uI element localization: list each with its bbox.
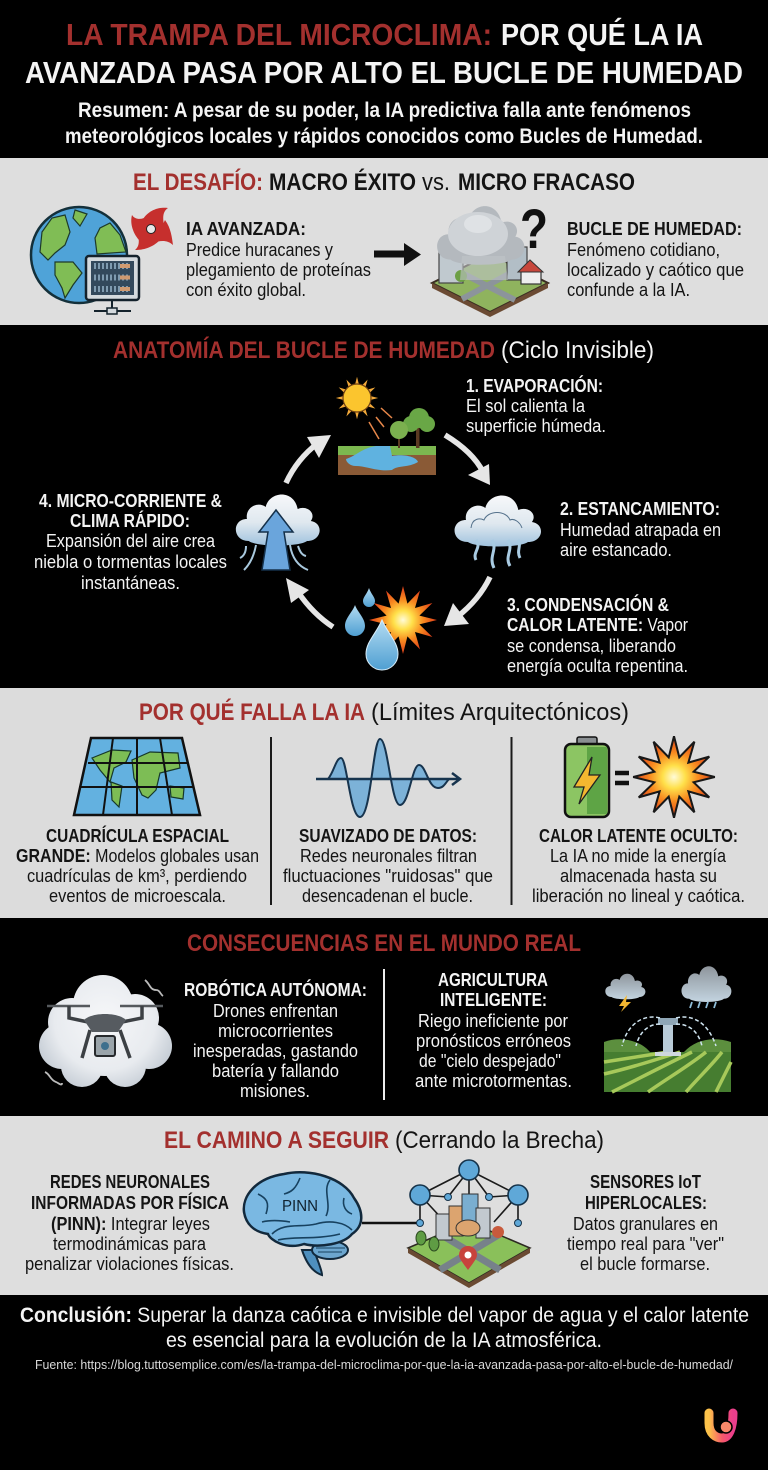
icon: cloud over city block (432, 206, 548, 317)
arrow: step 3 to 4 (286, 578, 333, 627)
icon: hurricane (131, 208, 173, 250)
text: IA avanzada: plegamiento de proteínas (186, 259, 371, 280)
heading: anatomía: ANATOMÍA DEL BUCLE DE HUMEDAD (113, 336, 495, 364)
text: sensores: el bucle formarse. (580, 1253, 710, 1274)
text: calor latente: almacenada hasta su (560, 865, 717, 886)
text: cuadrícula (16, 825, 259, 906)
text: robótica: microcorrientes (218, 1020, 333, 1041)
text: agricultura: ante microtormentas. (415, 1070, 572, 1091)
text: cuadrícula: cuadrículas de km³, perdiendo (27, 865, 247, 886)
text: evaporación: El sol calienta la (466, 395, 586, 416)
heading: el desafío: vs. (422, 169, 450, 196)
text: suavizado: desencadenan el bucle. (302, 885, 473, 906)
icon: IoT city network (408, 1160, 530, 1288)
text: suavizado: Redes neuronales filtran (300, 845, 477, 866)
connector line (362, 1222, 417, 1224)
text: calor latente (532, 825, 745, 906)
conclusion text: es esencial para la evolución de la IA atmosférica. (166, 1329, 602, 1352)
icon: spatial grid map (74, 738, 200, 815)
logo (709, 1413, 733, 1438)
heading: el desafío (133, 168, 635, 196)
icon: PINN brain (244, 1172, 361, 1275)
text: estancamiento: aire estancado. (560, 539, 672, 560)
icon: battery equals burst (565, 736, 715, 818)
icon: rising air in cloud (236, 494, 320, 570)
icon: smart irrigation field (604, 966, 731, 1092)
arrow: step 2 to 3 (444, 577, 490, 626)
text: sensores: Datos granulares en (573, 1213, 718, 1234)
heading: anatomía: (Ciclo Invisible) (501, 337, 654, 364)
text: micro-corriente: Expansión del aire crea (46, 530, 216, 551)
heading: por qué falla: (Límites Arquitectónicos) (371, 699, 629, 726)
heading: consecuencias: CONSECUENCIAS EN EL MUNDO REAL (187, 930, 581, 957)
panel: por qué falla la IA (0, 688, 768, 918)
summary text: Resumen: A pesar de su poder, la IA predictiva falla ante fenómenos (78, 99, 691, 122)
text: sensores: HIPERLOCALES: (585, 1192, 707, 1213)
text: suavizado (283, 825, 493, 906)
text: cuadrícula: eventos de microescala. (49, 885, 226, 906)
text: robótica: Drones enfrentan (213, 1000, 338, 1021)
text: PINN: termodinámicas para (53, 1233, 207, 1254)
heading: camino (164, 1127, 604, 1154)
text: condensación: 3. CONDENSACIÓN & (507, 594, 669, 615)
text: IA avanzada: Predice huracanes y (186, 239, 334, 260)
text: suavizado: fluctuaciones "ruidosas" que (283, 865, 493, 886)
text: evaporación: superficie húmeda. (466, 415, 606, 436)
text: robótica: batería y fallando (212, 1060, 339, 1081)
icon: water drops and latent heat burst (345, 586, 437, 670)
text: bucle de humedad: localizado y caótico que (567, 259, 744, 280)
text: IA avanzada (186, 218, 371, 300)
text: bucle de humedad: BUCLE DE HUMEDAD: (567, 218, 742, 239)
heading: por qué falla (139, 698, 629, 726)
icon: sun and wet ground (336, 377, 436, 475)
panel: header (0, 0, 768, 158)
text: robótica (184, 979, 367, 1101)
heading: el desafío: EL DESAFÍO: (133, 168, 263, 196)
text: micro-corriente: CLIMA RÁPIDO: (70, 510, 190, 531)
text: agricultura: pronósticos erróneos (416, 1030, 571, 1051)
text: evaporación: 1. EVAPORACIÓN: (466, 375, 603, 396)
title: POR QUÉ LA IA (501, 17, 703, 52)
text: robótica: misiones. (240, 1080, 310, 1101)
text: estancamiento: Humedad atrapada en (560, 519, 721, 540)
text: sensores: SENSORES IoT (590, 1171, 702, 1192)
text: IA avanzada: IA AVANZADA: (186, 218, 306, 239)
text: cuadrícula: CUADRÍCULA ESPACIAL (46, 825, 229, 846)
text: bucle de humedad: Fenómeno cotidiano, (567, 239, 720, 260)
source: Fuente: https://blog.tuttosemplice.com/es/la-trampa-del-microclima-por-que-la-ia-avanzada-pasa-por-alto-el-bucle-de-humedad/ (35, 1358, 734, 1372)
text: agricultura (415, 969, 572, 1091)
text: IA avanzada: con éxito global. (186, 279, 306, 300)
summary text: meteorológicos locales y rápidos conocidos como Bucles de Humedad. (65, 125, 703, 148)
summary text (65, 99, 703, 148)
text: condensación: energía oculta repentina. (507, 655, 688, 676)
icon: PINN brain: PINN (282, 1198, 318, 1215)
text: robótica: inesperadas, gastando (193, 1040, 358, 1061)
arrow: challenge (374, 243, 421, 266)
text: agricultura: Riego ineficiente por (418, 1010, 568, 1031)
text: calor latente: liberación no lineal y caótica. (532, 885, 745, 906)
heading: camino: (Cerrando la Brecha) (395, 1127, 604, 1154)
icon: drone in cloud (39, 975, 172, 1087)
text: bucle de humedad (567, 218, 744, 300)
arrow: step 1 to 2 (445, 435, 490, 485)
text: suavizado: SUAVIZADO DE DATOS: (299, 825, 477, 846)
text: robótica: ROBÓTICA AUTÓNOMA: (184, 979, 367, 1000)
text: condensación (507, 594, 688, 676)
text: bucle de humedad: confunde a la IA. (567, 279, 690, 300)
title (25, 17, 743, 90)
panel: anatomía del bucle (0, 325, 768, 688)
text: micro-corriente: niebla o tormentas locales (34, 551, 227, 572)
text: calor latente: La IA no mide la energía (550, 845, 727, 866)
heading: por qué falla: POR QUÉ FALLA LA IA (139, 698, 365, 726)
conclusion text (20, 1304, 749, 1352)
text: PINN: REDES NEURONALES (50, 1171, 210, 1192)
text: cuadrícula: GRANDE: Modelos globales usan (16, 845, 259, 866)
text: PINN (25, 1171, 234, 1274)
text: agricultura: AGRICULTURA (438, 969, 548, 990)
text: sensores (567, 1171, 724, 1274)
heading: el desafío: MICRO FRACASO (458, 169, 635, 196)
panel: conclusión (0, 1295, 768, 1470)
text: condensación: CALOR LATENTE: Vapor (507, 614, 688, 635)
panel: consecuencias (0, 918, 768, 1116)
icon: stagnant moist cloud (455, 496, 541, 568)
title: LA TRAMPA DEL MICROCLIMA: (66, 17, 492, 52)
icon: smoothed wave (316, 739, 460, 817)
panel: el camino a seguir (0, 1116, 768, 1295)
text: agricultura: INTELIGENTE: (440, 989, 547, 1010)
text: micro-corriente (34, 490, 227, 593)
text: micro-corriente: instantáneas. (81, 572, 180, 593)
text: micro-corriente: 4. MICRO-CORRIENTE & (39, 490, 222, 511)
text: PINN: INFORMADAS POR FÍSICA (31, 1192, 229, 1213)
text: evaporación (466, 375, 606, 436)
text: estancamiento: 2. ESTANCAMIENTO: (560, 498, 720, 519)
text: condensación: se condensa, liberando (507, 635, 676, 656)
icon: question mark: ? (520, 197, 548, 260)
heading: camino: EL CAMINO A SEGUIR (164, 1127, 389, 1154)
text: sensores: tiempo real para "ver" (567, 1233, 724, 1254)
icon: globe with server (31, 207, 139, 314)
heading: el desafío: MACRO ÉXITO (269, 168, 416, 196)
panel: el desafío (0, 158, 768, 325)
text: estancamiento (560, 498, 721, 560)
arrow: step 4 to 1 (286, 435, 331, 483)
text: PINN: (PINN): Integrar leyes (51, 1213, 210, 1234)
text: agricultura: de "cielo despejado" (419, 1050, 561, 1071)
text: PINN: penalizar violaciones físicas. (25, 1253, 234, 1274)
